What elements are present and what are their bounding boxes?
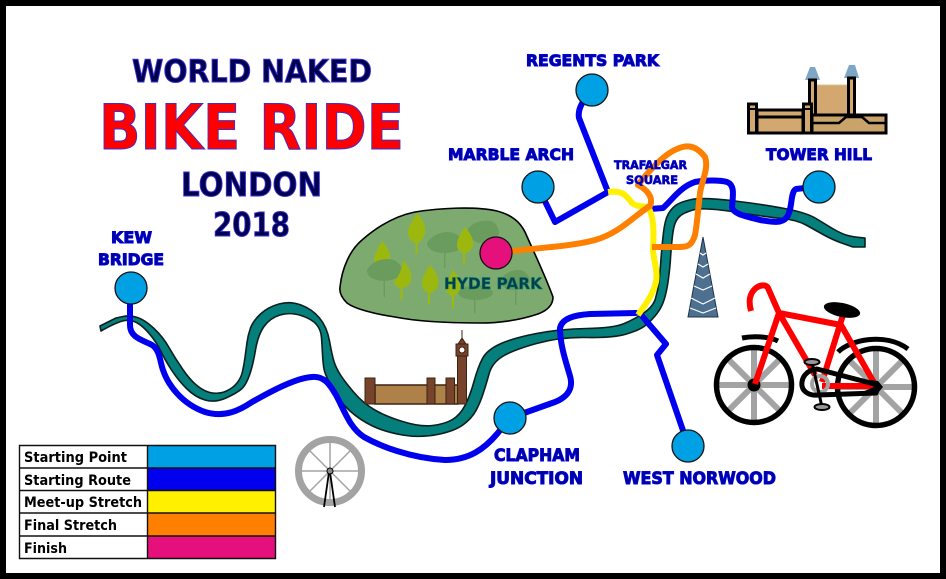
rear wheel [838, 348, 914, 426]
frame [750, 285, 876, 386]
icon: tower bridge [748, 65, 886, 133]
title [99, 54, 404, 244]
legend [20, 445, 276, 558]
location labels: HYDE PARK [444, 274, 543, 293]
river thames [100, 199, 865, 436]
legend labels: Meet-up Stretch [24, 495, 142, 511]
location labels: JUNCTION [489, 469, 583, 489]
route: kew bridge [130, 300, 510, 460]
hyde park [340, 208, 553, 323]
route: tower hill [650, 180, 805, 222]
location labels: TOWER HILL [766, 145, 872, 164]
icon: houses of parliament and big ben [365, 330, 468, 404]
starting routes [130, 90, 805, 460]
legend labels: Final Stretch [24, 518, 117, 534]
location labels: WEST NORWOOD [623, 469, 776, 489]
meet-up stretch [608, 192, 657, 315]
legend labels [24, 450, 142, 557]
legend grid [20, 445, 276, 558]
route: clapham junction [510, 313, 636, 418]
route: marble arch and regents park [538, 90, 608, 222]
icon: red bicycle [716, 285, 914, 426]
legend labels: Finish [24, 541, 67, 557]
legend colour swatches [148, 445, 276, 558]
trees [367, 213, 530, 313]
front wheel [716, 348, 792, 422]
saddle [822, 299, 862, 321]
location labels: CLAPHAM [494, 446, 580, 466]
route: west norwood [642, 316, 688, 445]
icon: london eye [298, 440, 362, 507]
chain and crank [802, 359, 883, 410]
mudguards [742, 337, 908, 352]
location labels: TRAFALGAR [614, 158, 687, 172]
title: LONDON [181, 165, 322, 204]
location labels [98, 51, 872, 489]
finish point [480, 237, 512, 269]
final stretch [497, 146, 706, 253]
starting points [115, 74, 835, 462]
title: BIKE RIDE [99, 91, 404, 164]
legend labels: Starting Route [24, 473, 131, 489]
title: 2018 [213, 205, 290, 244]
icon: the shard [688, 237, 718, 317]
location labels: MARBLE ARCH [448, 145, 574, 164]
location labels: KEW [111, 228, 152, 247]
legend labels: Starting Point [24, 450, 127, 466]
location labels: BRIDGE [98, 250, 164, 269]
title: WORLD NAKED [132, 54, 372, 90]
location labels: SQUARE [626, 173, 678, 187]
location labels: REGENTS PARK [526, 51, 660, 70]
